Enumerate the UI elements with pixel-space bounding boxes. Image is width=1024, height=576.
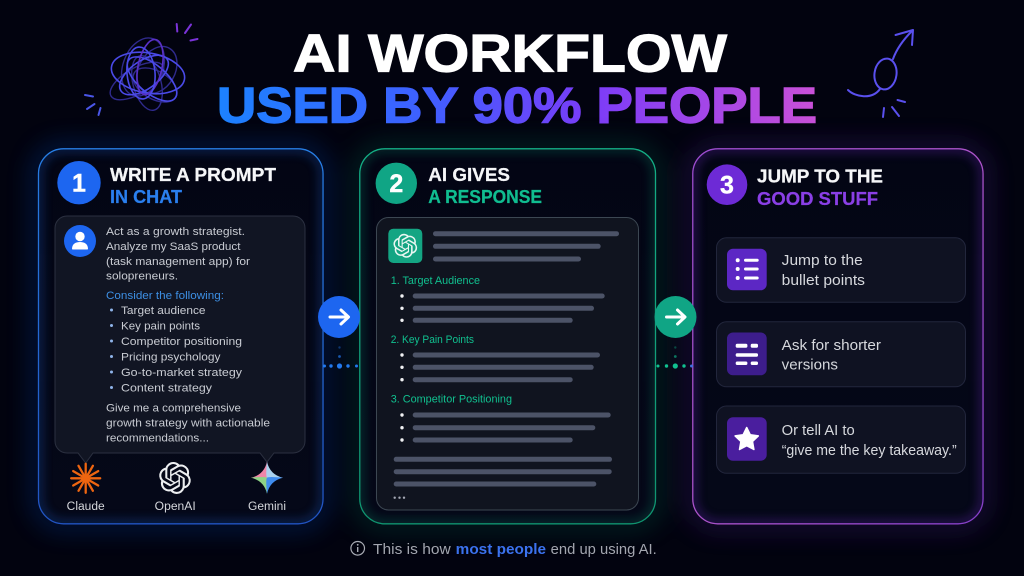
arrow: step 2 to step 3 — [654, 296, 696, 338]
bullets and ellipsis — [394, 294, 405, 499]
heading: jump to the good stuff: GOOD STUFF — [757, 188, 878, 209]
glows behind panels — [38, 149, 983, 524]
icon: star — [727, 417, 767, 461]
connector dots: blue — [323, 346, 358, 369]
section headings — [391, 275, 512, 405]
panel 2: AI gives a response — [360, 149, 656, 524]
connector dots: green — [656, 346, 693, 369]
placeholder text lines — [394, 231, 619, 486]
chat bubble with prompt — [55, 216, 305, 463]
logo: OpenAI — [155, 462, 196, 513]
prompt text: Target audience — [121, 305, 206, 317]
heading: jump to the good stuff: JUMP TO THE — [757, 166, 883, 186]
prompt text: Pricing psychology — [121, 352, 221, 364]
section headings: 3. Competitor Positioning — [391, 393, 512, 405]
prompt text: Content strategy — [121, 382, 212, 394]
icon: tangled scribble — [85, 24, 198, 115]
logo: Claude: Claude — [67, 501, 105, 513]
prompt text: (task management app) for — [106, 256, 250, 268]
heading: write a prompt in chat — [110, 164, 277, 207]
footer note: most people — [456, 542, 546, 558]
icon: short text — [727, 332, 767, 375]
prompt text: growth strategy with actionable — [106, 418, 270, 430]
prompt text: recommendations... — [106, 433, 209, 445]
icon: ChatGPT logo — [388, 229, 422, 263]
step number 2: 2 — [389, 170, 403, 198]
prompt text: Go-to-market strategy — [121, 367, 242, 379]
panel 3: jump to the good stuff — [693, 149, 983, 524]
title: AI WORKFLOW — [293, 24, 727, 84]
heading: AI gives a response: A RESPONSE — [428, 186, 542, 207]
panel 1: write a prompt — [38, 149, 323, 524]
section headings: 1. Target Audience — [391, 275, 480, 287]
icon: list — [727, 249, 767, 290]
icon: user avatar — [64, 225, 96, 257]
section headings: 2. Key Pain Points — [391, 334, 474, 346]
prompt text: Give me a comprehensive — [106, 403, 241, 415]
title — [217, 24, 817, 134]
step number 1: 1 — [72, 170, 86, 198]
heading: write a prompt in chat: IN CHAT — [110, 186, 183, 207]
logo: Gemini: Gemini — [248, 501, 286, 513]
prompt text — [106, 226, 270, 445]
card: bullet points: bullet points — [782, 273, 865, 289]
card: bullet points: Jump to the — [782, 253, 863, 269]
card: key takeaway: Or tell AI to — [782, 423, 855, 439]
card: shorter versions — [716, 322, 966, 387]
step number 3 — [707, 164, 747, 205]
heading: AI gives a response — [428, 164, 542, 207]
prompt text: Act as a growth strategist. — [106, 226, 245, 238]
card: key takeaway: “give me the key takeaway.” — [782, 443, 957, 459]
card: bullet points — [716, 238, 966, 302]
list bullets — [110, 308, 113, 389]
footer note: end up using AI. — [551, 542, 657, 558]
prompt text: Key pain points — [121, 320, 200, 332]
response card — [376, 218, 638, 510]
card: shorter versions: Ask for shorter — [782, 338, 881, 354]
prompt text: Consider the following: — [106, 290, 224, 302]
card: shorter versions: versions — [782, 358, 838, 374]
step number 3: 3 — [720, 172, 734, 200]
footer note: This is how — [373, 542, 451, 558]
logo: Gemini — [248, 462, 286, 513]
icon: looping arrow — [848, 30, 913, 117]
step number 1 — [57, 161, 101, 204]
title: USED BY 90% PEOPLE — [217, 78, 817, 134]
heading: write a prompt in chat: WRITE A PROMPT — [110, 164, 277, 185]
prompt text: Competitor positioning — [121, 336, 242, 348]
footer note — [351, 542, 657, 558]
step number 2 — [376, 163, 417, 204]
icon: info — [351, 542, 365, 555]
prompt text: solopreneurs. — [106, 270, 178, 282]
prompt text: Analyze my SaaS product — [106, 241, 241, 253]
card: key takeaway — [716, 406, 966, 473]
heading: jump to the good stuff — [757, 166, 883, 209]
arrow: step 1 to step 2 — [318, 296, 360, 338]
logo: Claude — [67, 464, 105, 513]
logo: OpenAI: OpenAI — [155, 501, 196, 513]
heading: AI gives a response: AI GIVES — [428, 164, 510, 185]
